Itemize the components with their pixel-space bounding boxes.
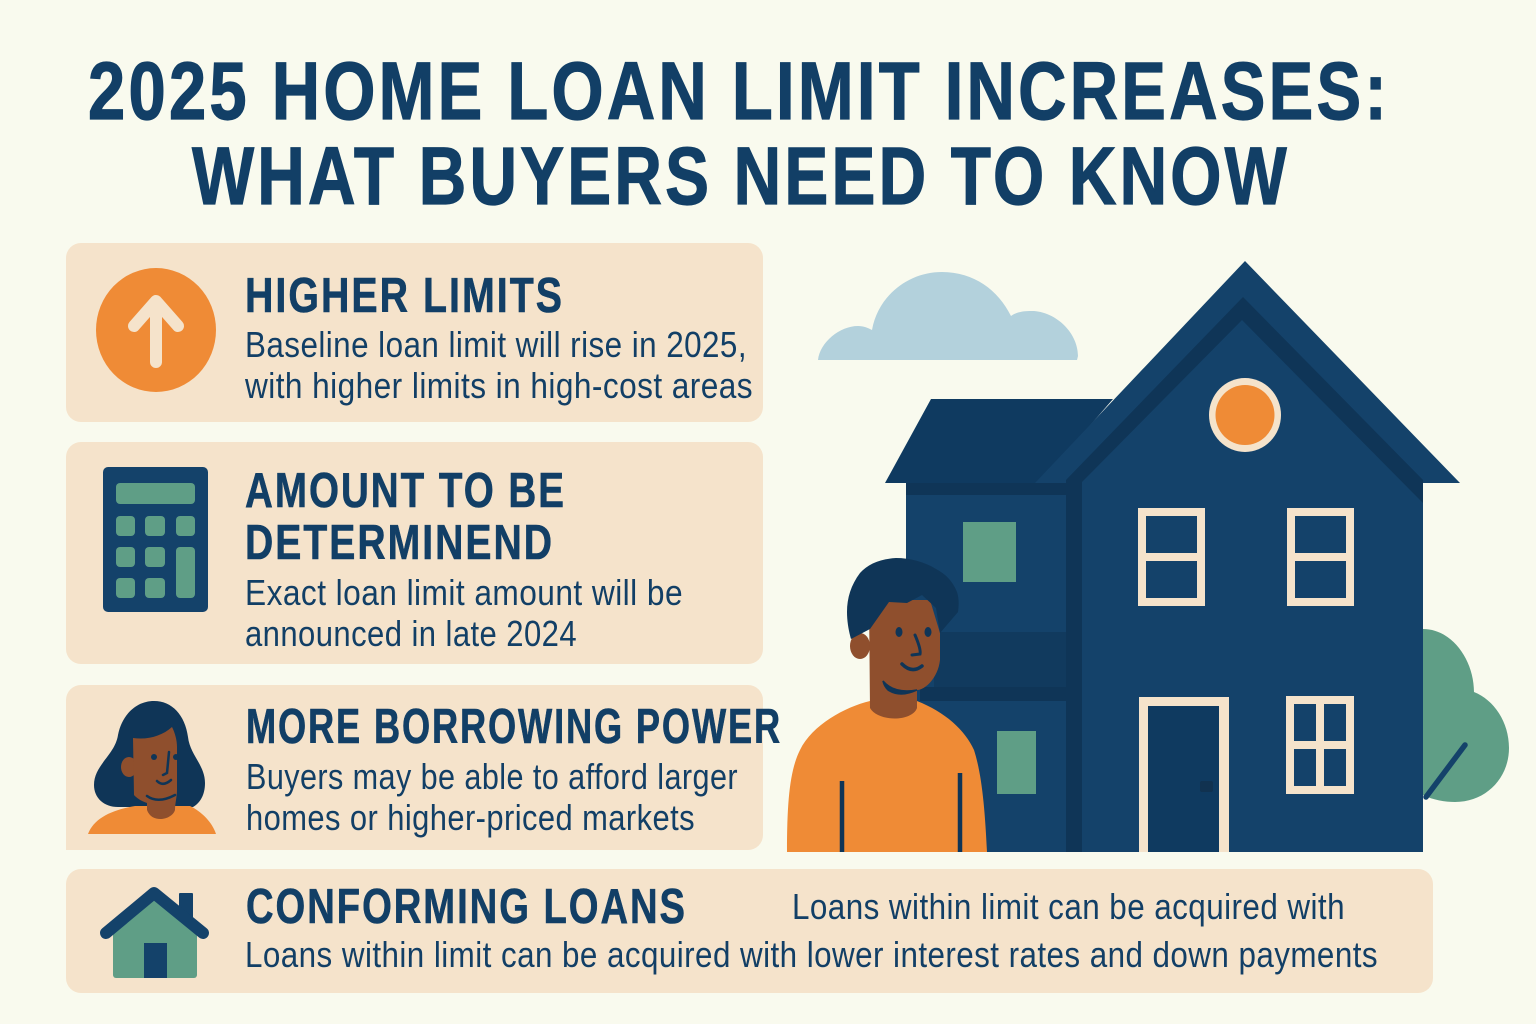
icon: cloud bbox=[818, 272, 1078, 360]
text: higher limits description bbox=[244, 324, 753, 406]
text: amount description bbox=[245, 572, 683, 654]
text: amount description: announced in late 2024 bbox=[245, 613, 577, 654]
main gabled body bbox=[1035, 261, 1460, 852]
text: conforming loans side note: Loans within limit can be acquired with bbox=[792, 886, 1345, 927]
icon: tree bbox=[1423, 629, 1509, 802]
icon: small house bbox=[106, 893, 203, 978]
heading: conforming loans: CONFORMING LOANS bbox=[246, 880, 687, 934]
panel: amount to be determined bbox=[66, 442, 763, 664]
upper window right bbox=[1291, 512, 1350, 602]
text: higher limits description: with higher limits in high-cost areas bbox=[244, 365, 753, 406]
heading: amount to be determinend: AMOUNT TO BE bbox=[245, 464, 566, 518]
panel: higher limits bbox=[66, 243, 763, 422]
text: amount description: Exact loan limit amount will be bbox=[245, 572, 683, 613]
icon: woman portrait bbox=[88, 701, 216, 834]
text: higher limits description: Baseline loan limit will rise in 2025, bbox=[245, 324, 747, 365]
illustration: house bbox=[885, 261, 1460, 852]
upper window left bbox=[1142, 512, 1201, 602]
heading: amount to be determinend: DETERMINEND bbox=[245, 516, 554, 570]
heading: higher limits: HIGHER LIMITS bbox=[245, 269, 564, 323]
heading: more borrowing power: MORE BORROWING POWER bbox=[246, 700, 782, 754]
text: borrowing power description: homes or higher-priced markets bbox=[246, 797, 695, 838]
icon: calculator bbox=[103, 467, 208, 612]
lower window right bbox=[1290, 700, 1350, 790]
text: borrowing power description: Buyers may be able to afford larger bbox=[246, 756, 738, 797]
title bbox=[88, 46, 1390, 222]
text: conforming loans description: Loans within limit can be acquired with lower interest rates and down payments bbox=[245, 934, 1378, 975]
heading: amount to be determinend bbox=[245, 464, 566, 570]
front door bbox=[1139, 697, 1229, 852]
left wing bbox=[885, 399, 1113, 852]
illustration: man in orange sweater bbox=[787, 558, 987, 852]
title: WHAT BUYERS NEED TO KNOW bbox=[192, 131, 1290, 222]
text: borrowing power description bbox=[246, 756, 738, 838]
round attic window bbox=[1209, 378, 1281, 452]
panel: conforming loans bbox=[66, 869, 1433, 993]
icon: up arrow in orange circle bbox=[96, 268, 216, 392]
panel: more borrowing power bbox=[66, 685, 782, 850]
